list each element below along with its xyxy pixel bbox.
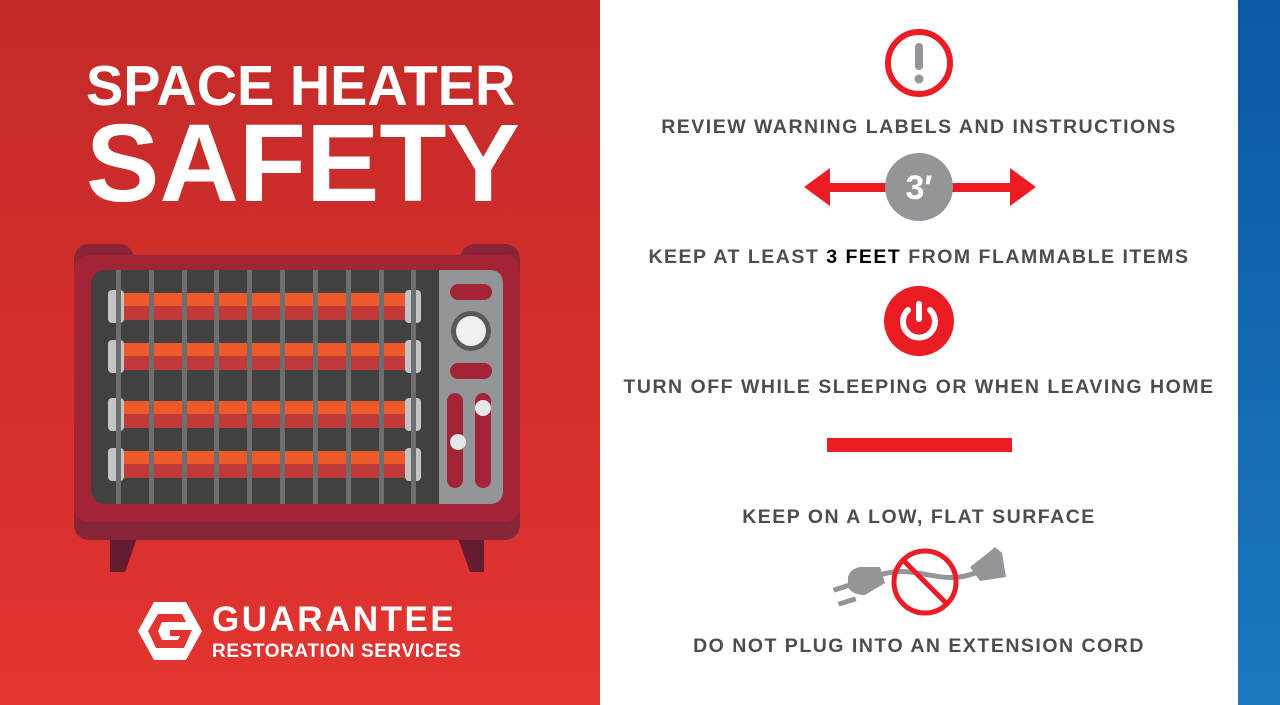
- text: 3 feet: KEEP AT LEAST 3 FEET FROM FLAMMABLE ITEMS: [648, 246, 1190, 268]
- icon: no extension cord: [832, 547, 1006, 616]
- panel: left red: [0, 0, 600, 705]
- text: warning labels: REVIEW WARNING LABELS AND INSTRUCTIONS: [661, 116, 1177, 138]
- icon: warning: [885, 29, 953, 97]
- logo: RESTORATION SERVICES: [212, 641, 462, 662]
- logo: [138, 600, 462, 662]
- icon: flat surface: [827, 438, 1012, 452]
- icon: G hexagon: [138, 602, 202, 660]
- text: turn off: TURN OFF WHILE SLEEPING OR WHEN LEAVING HOME: [623, 376, 1215, 398]
- title: SPACE HEATER: [86, 54, 515, 118]
- blue strip: [1238, 0, 1280, 705]
- icon: 3 feet arrow: [804, 153, 1036, 221]
- title: SAFETY: [86, 102, 520, 225]
- heater illustration: [74, 244, 520, 572]
- text: flat surface: KEEP ON A LOW, FLAT SURFACE: [742, 506, 1096, 528]
- logo: GUARANTEE: [212, 600, 456, 639]
- icon: 3 feet arrow: 3′: [905, 169, 933, 207]
- icon: power: [884, 286, 954, 356]
- text: extension cord: DO NOT PLUG INTO AN EXTENSION CORD: [693, 635, 1145, 657]
